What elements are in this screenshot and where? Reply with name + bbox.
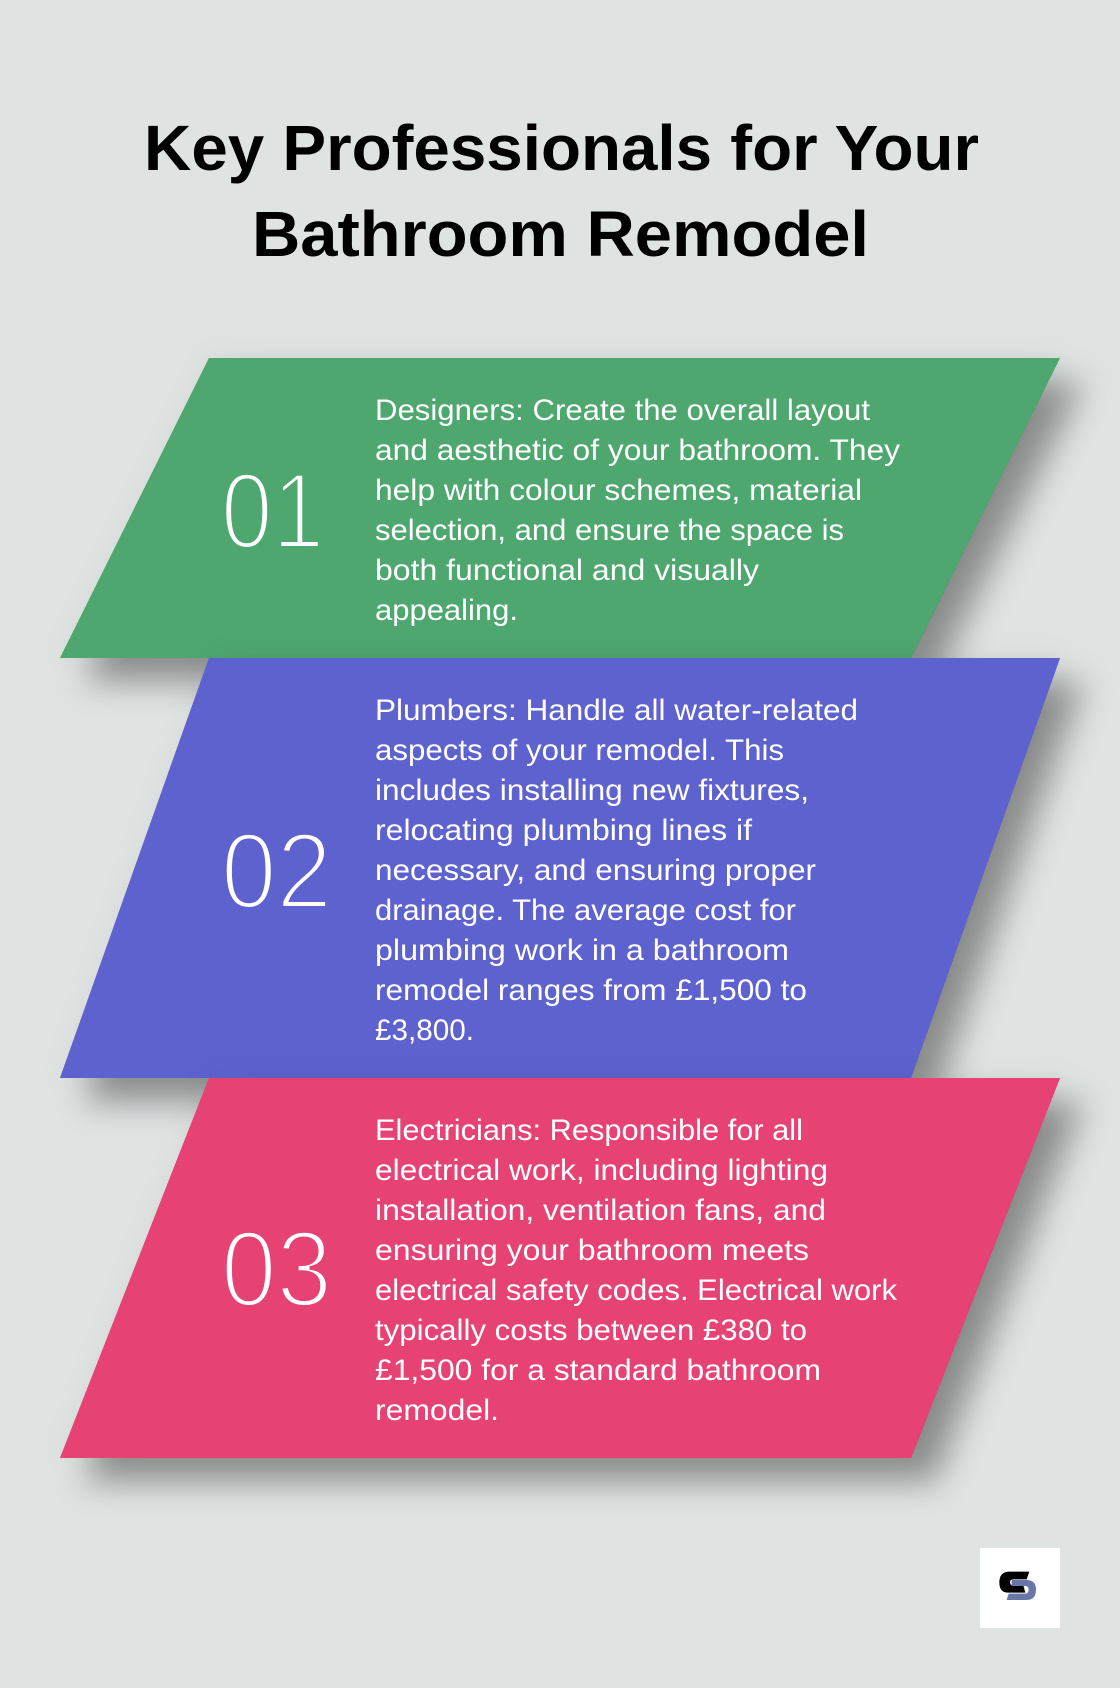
electricians description: Electricians: Responsible for all [375,1114,803,1147]
designers description: Designers: Create the overall layout [375,394,871,427]
plumbers description [375,694,858,1047]
panel: electricians [60,1078,1060,1458]
plumbers description: aspects of your remodel. This [375,734,784,767]
designers description: selection, and ensure the space is [375,514,844,547]
electricians description [375,1114,898,1427]
plumbers description: Plumbers: Handle all water-related [375,694,858,727]
title: Bathroom Remodel [252,198,869,270]
designers description [375,394,900,627]
plumbers description: relocating plumbing lines if [375,814,753,847]
blue parallelogram [60,658,1060,1078]
panel: designers [60,358,1060,658]
electricians description: remodel. [375,1394,499,1427]
plumbers description: plumbing work in a bathroom [375,934,789,967]
logo [980,1548,1060,1628]
plumbers description: remodel ranges from £1,500 to [375,974,807,1007]
electricians description: electrical work, including lighting [375,1154,828,1187]
designers description: both functional and visually [375,554,759,587]
panel: plumbers [60,658,1060,1078]
plumbers description: necessary, and ensuring proper [375,854,816,887]
electricians description: £1,500 for a standard bathroom [375,1354,821,1387]
designers description: appealing. [375,594,518,627]
pink parallelogram [60,1078,1060,1458]
number 03: 03 [221,1208,332,1329]
title [144,112,979,270]
electricians description: typically costs between £380 to [375,1314,807,1347]
number 02: 02 [221,810,332,931]
designers description: and aesthetic of your bathroom. They [375,434,900,467]
green parallelogram [60,358,1060,658]
title: Key Professionals for Your [144,112,979,184]
number 01: 01 [221,450,324,571]
electricians description: electrical safety codes. Electrical work [375,1274,898,1307]
designers description: help with colour schemes, material [375,474,862,507]
electricians description: ensuring your bathroom meets [375,1234,809,1267]
plumbers description: drainage. The average cost for [375,894,796,927]
plumbers description: includes installing new fixtures, [375,774,809,807]
plumbers description: £3,800. [375,1014,474,1047]
icon: logo mark [999,1572,1036,1600]
electricians description: installation, ventilation fans, and [375,1194,826,1227]
